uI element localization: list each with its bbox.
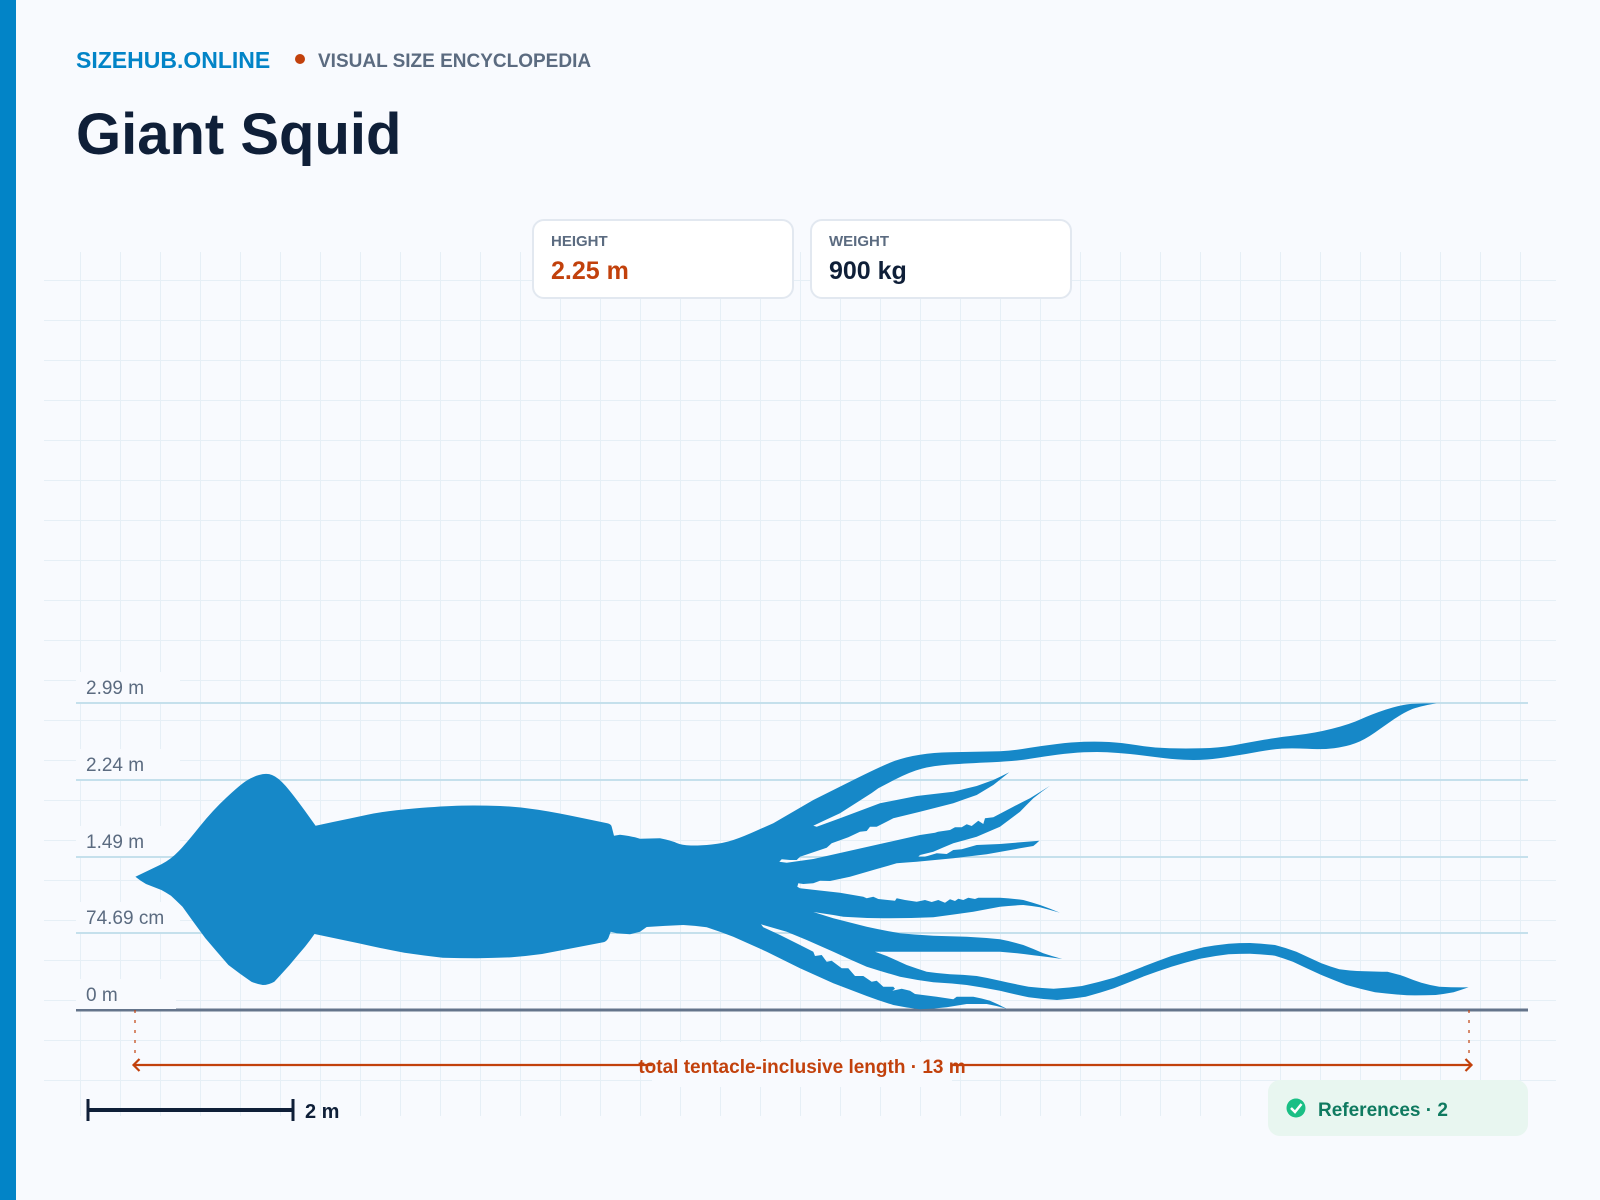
height axis labels: 2.24 m	[86, 755, 144, 776]
dotted extents	[135, 1010, 1469, 1060]
height axis labels: 2.99 m	[86, 678, 144, 699]
length label: total tentacle-inclusive length · 13 m	[638, 1057, 966, 1078]
scale bar	[86, 1099, 339, 1123]
card: weight	[810, 219, 1072, 299]
brand dot	[295, 54, 305, 64]
height axis labels	[76, 672, 180, 1009]
length label	[638, 1042, 966, 1087]
card: height: 2.25 m	[551, 257, 629, 285]
card: height	[532, 219, 794, 299]
tagline: VISUAL SIZE ENCYCLOPEDIA	[318, 51, 591, 72]
card: weight: WEIGHT	[829, 233, 889, 250]
baseline	[76, 1008, 1528, 1012]
height axis labels: 1.49 m	[86, 832, 144, 853]
title: Giant Squid	[76, 102, 401, 167]
brand name: SIZEHUB.ONLINE	[76, 47, 270, 73]
left accent bar	[0, 0, 16, 1200]
card: height: HEIGHT	[551, 233, 608, 250]
height gridlines	[76, 702, 1528, 934]
height axis labels: 74.69 cm	[86, 908, 164, 929]
scale bar: 2 m	[305, 1101, 339, 1123]
references badge	[1268, 1080, 1528, 1136]
height axis labels: 0 m	[86, 985, 118, 1006]
card: weight: 900 kg	[829, 257, 907, 285]
squid silhouette	[135, 703, 1469, 1009]
total length arrow	[134, 1059, 1472, 1071]
references badge: References · 2	[1318, 1100, 1448, 1121]
